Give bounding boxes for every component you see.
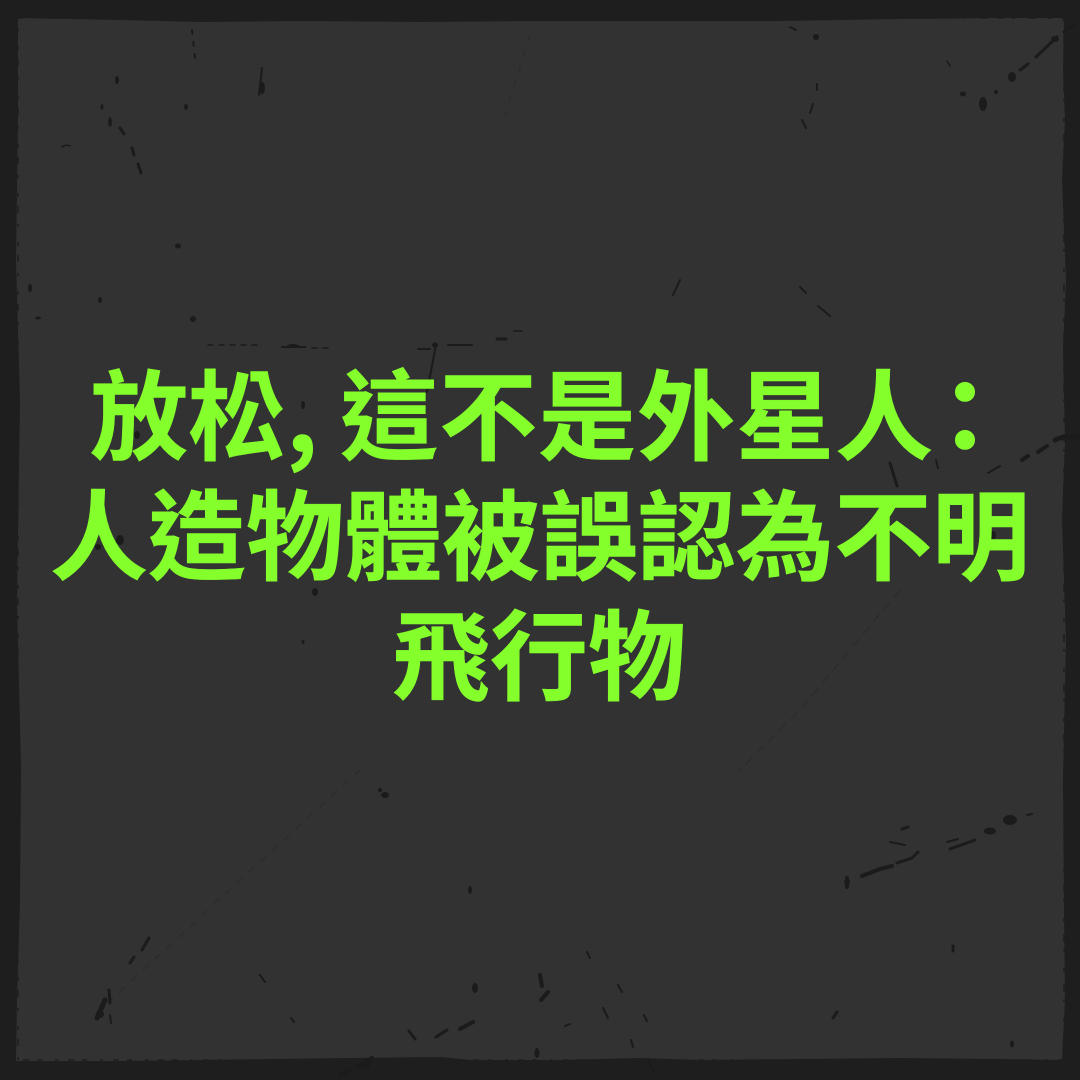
title line 1: 放松, 這不是外星人 — [90, 339, 934, 481]
title line 3: 飛行物 — [392, 579, 686, 721]
title line 2: 人造物體被誤認為不明 — [50, 459, 1030, 601]
title: ： — [915, 337, 1015, 482]
